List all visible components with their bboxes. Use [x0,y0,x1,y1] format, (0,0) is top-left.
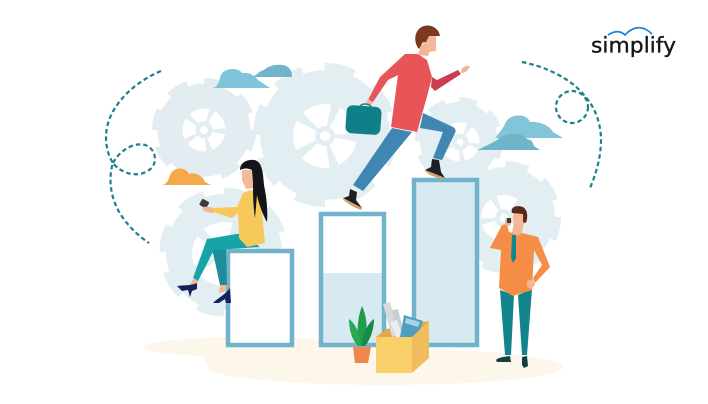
cloud: right light blue [495,115,563,138]
bar: short [228,251,292,345]
cloud: top light blue [213,69,270,88]
floor shadow [144,337,563,385]
cloud: top dark blue [250,65,292,77]
cloud: right dark blue [477,134,540,150]
figure: man on phone [490,206,550,368]
logo: simplify: simplify [591,34,676,58]
gear: upper left [158,84,250,176]
cloud: orange [162,168,211,185]
gear: behind man [455,167,555,267]
dashed path: right [522,62,601,188]
figure: woman with phone [177,160,267,303]
gear: right of runner [420,102,498,180]
bar: medium [321,214,384,345]
figure: running man [342,26,470,210]
gear: behind woman [166,194,282,310]
plant [349,306,374,363]
gear: large centre [260,70,390,200]
briefcase [345,104,382,135]
box with supplies [376,302,429,373]
dashed path: left [106,71,161,243]
bar: tall [414,180,477,345]
